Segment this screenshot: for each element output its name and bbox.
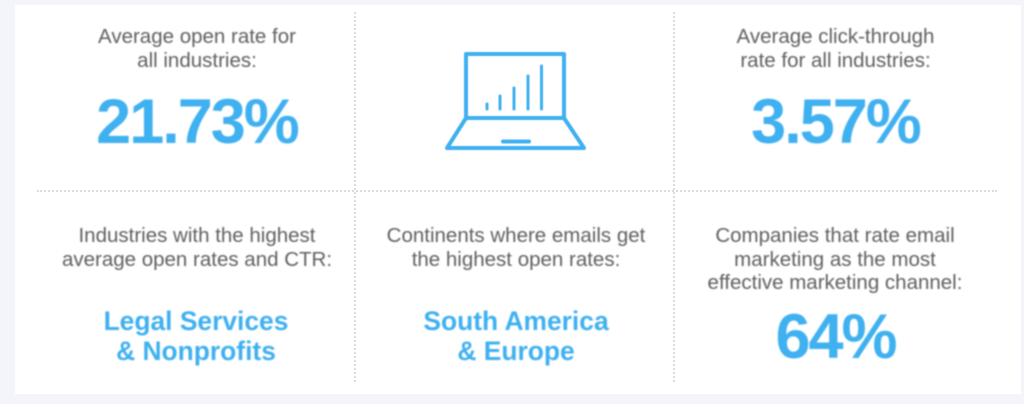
continents value: South America (423, 306, 609, 336)
open rate value: 21.73% (96, 87, 298, 157)
panel: email marketing effectiveness (707, 224, 962, 372)
open rate heading: Average open rate for (98, 25, 296, 48)
industries heading: average open rates and CTR: (62, 248, 332, 270)
industries heading (62, 224, 332, 271)
click-through value: 3.57% (751, 87, 920, 157)
industries value: & Nonprofits (116, 336, 276, 366)
click-through heading (736, 25, 934, 72)
effectiveness heading: effective marketing channel: (708, 271, 962, 294)
industries heading: Industries with the highest (78, 224, 316, 247)
continents heading: the highest open rates: (412, 248, 620, 270)
effectiveness heading (707, 224, 962, 294)
continents value (423, 306, 610, 366)
industries value (104, 306, 288, 366)
icon: laptop with bar chart (444, 51, 587, 151)
open rate heading: all industries: (137, 48, 257, 72)
click-through heading: rate for all industries: (740, 48, 931, 72)
continents value: & Europe (457, 336, 575, 366)
panel: top industries (62, 224, 332, 366)
panel: top continents (386, 224, 646, 366)
click-through heading: Average click-through (737, 25, 934, 48)
effectiveness heading: Companies that rate email (715, 224, 955, 247)
industries value: Legal Services (104, 306, 288, 336)
effectiveness heading: marketing as the most (734, 248, 936, 270)
panel: click-through rate (736, 25, 934, 157)
continents heading (386, 224, 646, 271)
effectiveness value: 64% (775, 302, 896, 372)
continents heading: Continents where emails get (387, 224, 645, 247)
open rate heading (97, 25, 296, 72)
panel: average open rate (96, 25, 300, 157)
